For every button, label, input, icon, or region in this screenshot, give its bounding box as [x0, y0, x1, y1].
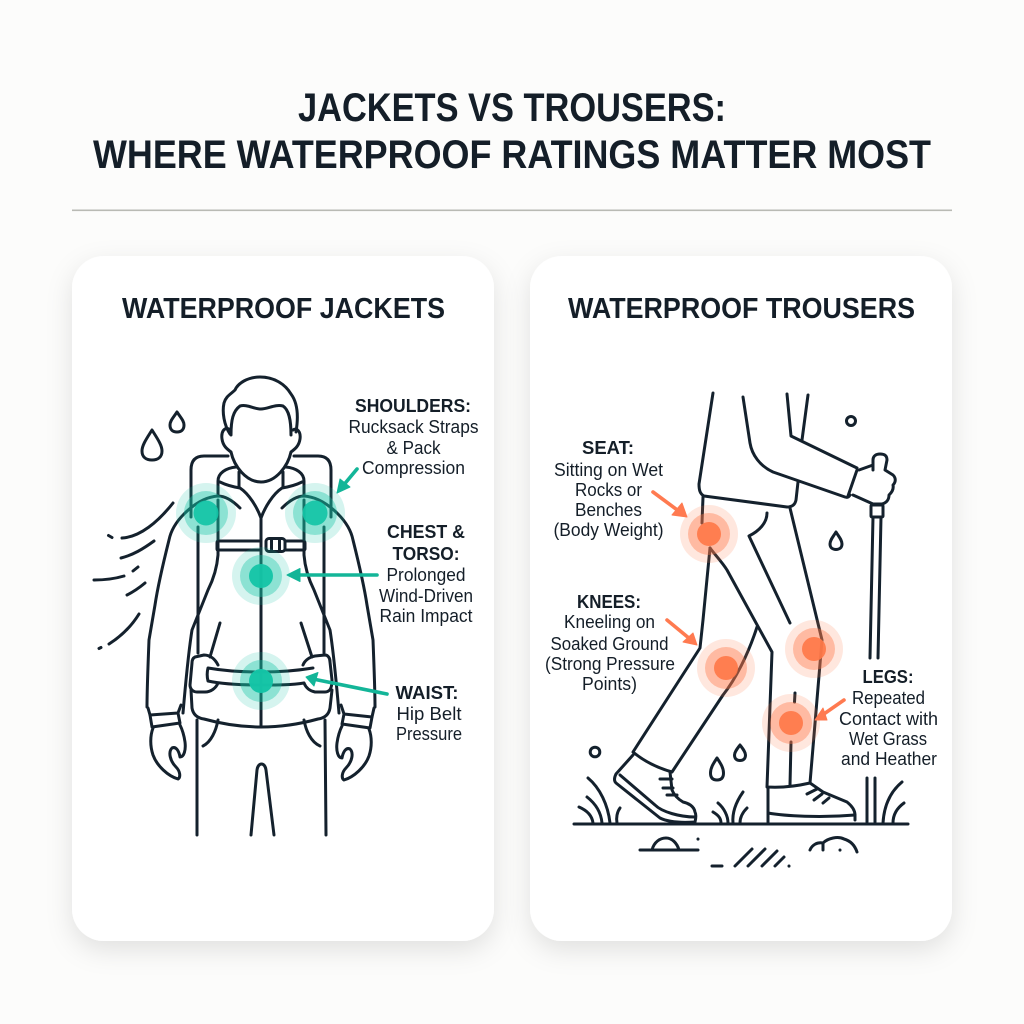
- label: seat: (Body Weight): [554, 520, 664, 540]
- label: legs: [839, 666, 938, 769]
- hotspot: waist: [232, 652, 290, 710]
- label: chest and torso: [379, 521, 473, 626]
- label: knees: Soaked Ground: [550, 634, 668, 654]
- arrow: waist: [306, 672, 387, 694]
- hotspot: right knee: [785, 620, 843, 678]
- label: knees: [545, 591, 675, 694]
- label: shoulders: Compression: [362, 458, 465, 478]
- arrow: shoulders: [337, 469, 357, 493]
- hotspot: left shoulder: [176, 483, 236, 543]
- jacket hem: [191, 690, 332, 727]
- illustration: hiker with rucksack: [147, 377, 375, 835]
- label: chest and torso: Prolonged: [386, 565, 466, 585]
- rear boot: [768, 783, 855, 822]
- chest strap and buckle: [217, 538, 305, 552]
- illustration: walking legs: [574, 393, 908, 866]
- title: [93, 86, 931, 177]
- label: legs: and Heather: [841, 749, 937, 769]
- label: chest and torso: CHEST &: [387, 521, 465, 542]
- front leg: [633, 497, 757, 772]
- label: seat: Rocks or: [575, 480, 642, 500]
- hip belt: [190, 655, 332, 692]
- hotspot: lower leg: [762, 694, 820, 752]
- label: seat: Sitting on Wet: [554, 460, 663, 480]
- ground marks: [640, 838, 857, 866]
- label: shoulders: & Pack: [386, 438, 441, 458]
- front boot: [614, 755, 696, 822]
- label: legs: Contact with: [839, 709, 938, 729]
- hotspot: left knee: [697, 639, 755, 697]
- panel: waterproof jackets: [72, 256, 494, 941]
- trousers: [197, 720, 326, 835]
- label: shoulders: SHOULDERS:: [355, 395, 471, 416]
- label: seat: [554, 437, 664, 540]
- label: chest and torso: Wind-Driven: [379, 586, 473, 606]
- jacket: [699, 393, 857, 507]
- hand on pole: [848, 454, 895, 504]
- icon: wind lines: [94, 503, 173, 648]
- rucksack frame: [191, 456, 228, 517]
- ground: [574, 822, 908, 826]
- grass: [579, 778, 904, 823]
- title: WHERE WATERPROOF RATINGS MATTER MOST: [93, 133, 931, 177]
- heading: waterproof jackets: WATERPROOF JACKETS: [122, 293, 445, 325]
- label: chest and torso: TORSO:: [392, 543, 460, 564]
- label: waist: Hip Belt: [396, 704, 462, 724]
- label: knees: (Strong Pressure: [545, 654, 675, 674]
- label: waist: WAIST:: [396, 682, 458, 703]
- rear leg: [710, 508, 822, 787]
- label: knees: Points): [582, 674, 637, 694]
- arrow: seat: [653, 492, 687, 517]
- hotspot: chest: [232, 547, 290, 605]
- icon: rain drops: [142, 412, 184, 460]
- icon: rain drops and bubbles: [590, 416, 856, 780]
- hotspot: right shoulder: [285, 483, 345, 543]
- arrow: knees: [667, 620, 697, 645]
- arrow: chest: [287, 568, 377, 582]
- arrow: legs: [815, 700, 844, 720]
- heading: waterproof trousers: WATERPROOF TROUSERS: [568, 293, 915, 325]
- zip: [260, 518, 262, 726]
- jacket right side: [261, 467, 375, 780]
- label: knees: KNEES:: [577, 591, 641, 612]
- panel: waterproof trousers: [530, 256, 952, 941]
- label: legs: Repeated: [852, 688, 925, 708]
- label: chest and torso: Rain Impact: [380, 606, 472, 626]
- jacket left side: [147, 467, 261, 779]
- label: legs: LEGS:: [862, 666, 914, 687]
- label: legs: Wet Grass: [849, 729, 927, 749]
- hotspot: seat: [680, 505, 738, 563]
- title: JACKETS VS TROUSERS:: [298, 86, 726, 130]
- label: knees: Kneeling on: [564, 612, 655, 632]
- head: [222, 377, 300, 482]
- label: seat: SEAT:: [582, 437, 634, 458]
- label: waist: [396, 682, 462, 744]
- label: shoulders: Rucksack Straps: [348, 417, 478, 437]
- label: seat: Benches: [575, 500, 642, 520]
- label: shoulders: [348, 395, 478, 478]
- label: waist: Pressure: [396, 724, 462, 744]
- walking pole: [867, 505, 883, 822]
